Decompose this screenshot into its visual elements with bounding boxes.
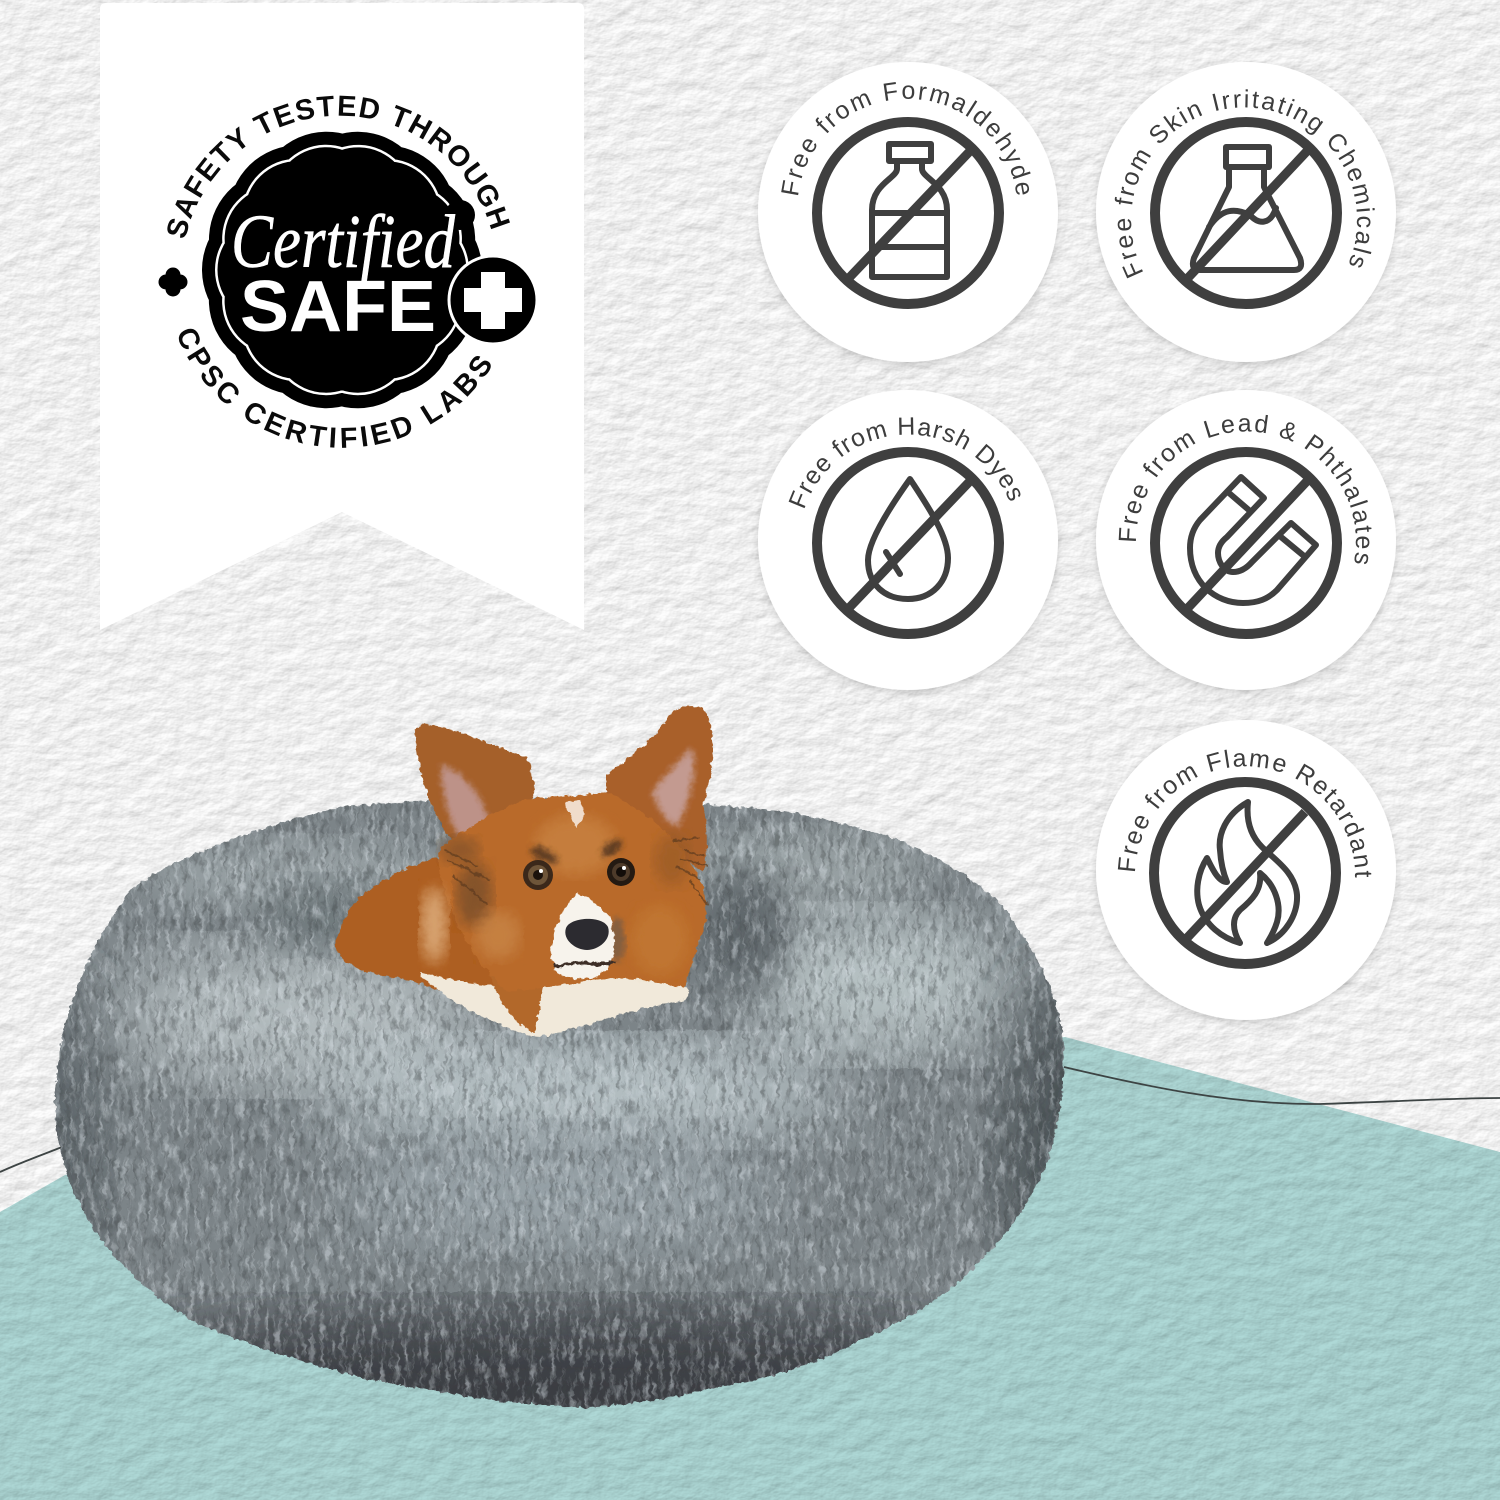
brown neck wedge [490, 975, 545, 1032]
badge: free from lead and phthalates [1093, 390, 1399, 696]
dog bed: front roll over dog [53, 941, 1064, 1408]
right ear [606, 706, 712, 872]
label: Free from Harsh Dyes [788, 417, 1020, 508]
white ribbon banner [100, 3, 584, 630]
thin cable line [0, 1067, 1500, 1172]
badge text: top arc: SAFETY TESTED THROUGH [167, 96, 510, 238]
plus icon [449, 256, 537, 344]
muzzle [551, 893, 614, 979]
brow marks [528, 836, 625, 867]
badge: free from harsh dyes [755, 390, 1061, 696]
teal floor shape [0, 1037, 1500, 1500]
dog bed: back [0, 790, 1170, 1490]
chest [418, 972, 690, 1042]
icon: drop [817, 452, 999, 634]
label: Free from Lead & Phthalates [1118, 414, 1372, 564]
right inner ear [652, 748, 694, 828]
badge text: bottom arc: CPSC CERTIFIED LABS [178, 328, 491, 448]
nose [565, 919, 609, 950]
label: Free from Formaldehyde [781, 82, 1031, 196]
left ear [415, 724, 534, 860]
badge: free from formaldehyde [755, 62, 1061, 368]
icon: magnet [1155, 452, 1337, 634]
scalloped seal [217, 145, 475, 395]
icon: flask [1155, 122, 1337, 304]
label: Free from Flame Retardant [1118, 750, 1372, 878]
head shading [421, 815, 690, 975]
head [439, 792, 706, 990]
badge: free from skin irritating chemicals [1093, 62, 1399, 368]
eyes [523, 858, 635, 890]
badge: free from flame retardant [1093, 720, 1399, 1026]
left inner ear [441, 765, 491, 842]
icon: flame [1154, 782, 1336, 964]
icon: bottle [817, 122, 999, 304]
clover icon [158, 268, 188, 296]
label: Free from Skin Irritating Chemicals [1114, 89, 1375, 278]
dog [335, 706, 712, 1042]
certified safe badge [158, 96, 536, 448]
certified script: Certified [231, 200, 456, 284]
forehead blaze [565, 800, 584, 827]
fur strands [445, 838, 708, 905]
safe wordmark: SAFE [240, 267, 436, 347]
mouth [552, 962, 615, 966]
dog body [335, 858, 540, 1030]
